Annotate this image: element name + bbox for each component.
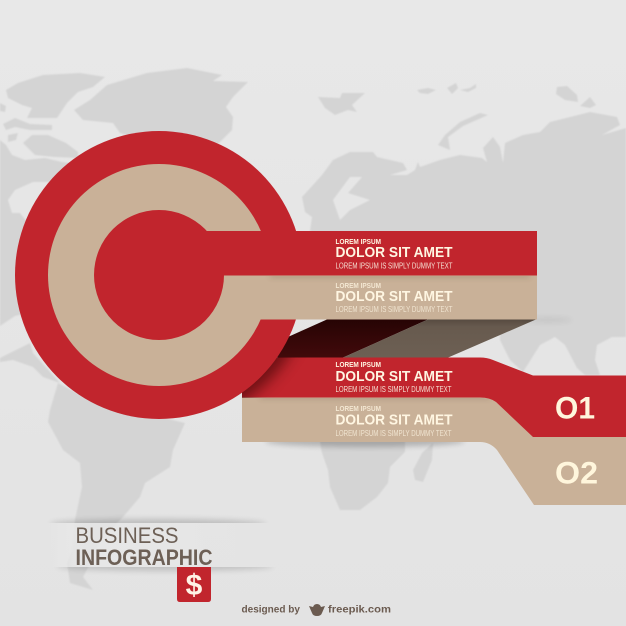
cast shadow: dark maroon and brown fold xyxy=(270,318,572,358)
footer credit: freepik.com xyxy=(328,604,391,616)
circle shadow on lower red ribbon xyxy=(242,357,298,398)
text block 1: LOREM IPSUM xyxy=(336,239,381,246)
map: central america xyxy=(0,343,60,383)
heading: INFOGRAPHIC xyxy=(76,545,212,570)
number 02: O2 xyxy=(555,454,598,490)
ribbon shadow under lower tan band xyxy=(266,442,464,450)
map: eurasia xyxy=(302,112,626,375)
text block 1 xyxy=(336,239,453,270)
footer credit: designed by xyxy=(242,604,300,616)
outer red circle xyxy=(15,131,303,419)
tan ring xyxy=(48,164,270,386)
text block 2: LOREM IPSUM IS SIMPLY DUMMY TEXT xyxy=(336,305,453,314)
map: northern islands west xyxy=(6,73,105,118)
map: northern landmass xyxy=(74,68,248,160)
map: novaya zemlya xyxy=(438,113,488,150)
map: arctic small islands xyxy=(417,83,596,108)
map: madagascar xyxy=(413,443,433,482)
maroon fold xyxy=(270,319,429,358)
heading: BUSINESS xyxy=(76,523,178,548)
upper tan ribbon shadow xyxy=(270,276,530,279)
text block 3: DOLOR SIT AMET xyxy=(336,369,453,385)
text block 3 xyxy=(336,362,453,394)
number 01: O1 xyxy=(555,390,595,426)
icon: dollar badge xyxy=(177,567,211,602)
upper red ribbon xyxy=(205,231,537,276)
text block 3: LOREM IPSUM xyxy=(336,362,381,369)
text block 2: DOLOR SIT AMET xyxy=(336,289,453,305)
brown fold xyxy=(342,319,537,358)
text block 4: LOREM IPSUM IS SIMPLY DUMMY TEXT xyxy=(336,429,452,438)
text block 1: DOLOR SIT AMET xyxy=(336,245,453,261)
icon: freepik crown xyxy=(309,604,325,616)
lower ribbon: tan 02 xyxy=(242,397,626,505)
map: north america west xyxy=(0,140,85,326)
heading xyxy=(76,523,212,570)
text block 4: DOLOR SIT AMET xyxy=(336,412,453,428)
map: south america xyxy=(48,383,185,590)
text block 4: LOREM IPSUM xyxy=(336,406,381,413)
title band shadows xyxy=(50,519,273,571)
fold soft edge xyxy=(524,318,572,322)
text block 2: LOREM IPSUM xyxy=(336,283,381,290)
map: arctic archipelago xyxy=(0,103,78,158)
text block 2 xyxy=(336,283,453,314)
shadow on lower tan ribbon xyxy=(261,398,488,400)
inner red disc xyxy=(94,210,224,340)
text block 4 xyxy=(336,406,453,438)
footer credit xyxy=(242,604,391,616)
circle emblem and upper ribbons xyxy=(15,131,537,419)
map: africa xyxy=(300,330,405,510)
text block 3: LOREM IPSUM IS SIMPLY DUMMY TEXT xyxy=(336,385,452,394)
text block 1: LOREM IPSUM IS SIMPLY DUMMY TEXT xyxy=(336,262,453,270)
lower ribbon: red 01 xyxy=(242,358,626,437)
title band xyxy=(45,523,280,567)
map: svalbard xyxy=(318,93,365,115)
icon: dollar badge: $ xyxy=(186,569,203,602)
upper tan ribbon xyxy=(159,276,537,320)
